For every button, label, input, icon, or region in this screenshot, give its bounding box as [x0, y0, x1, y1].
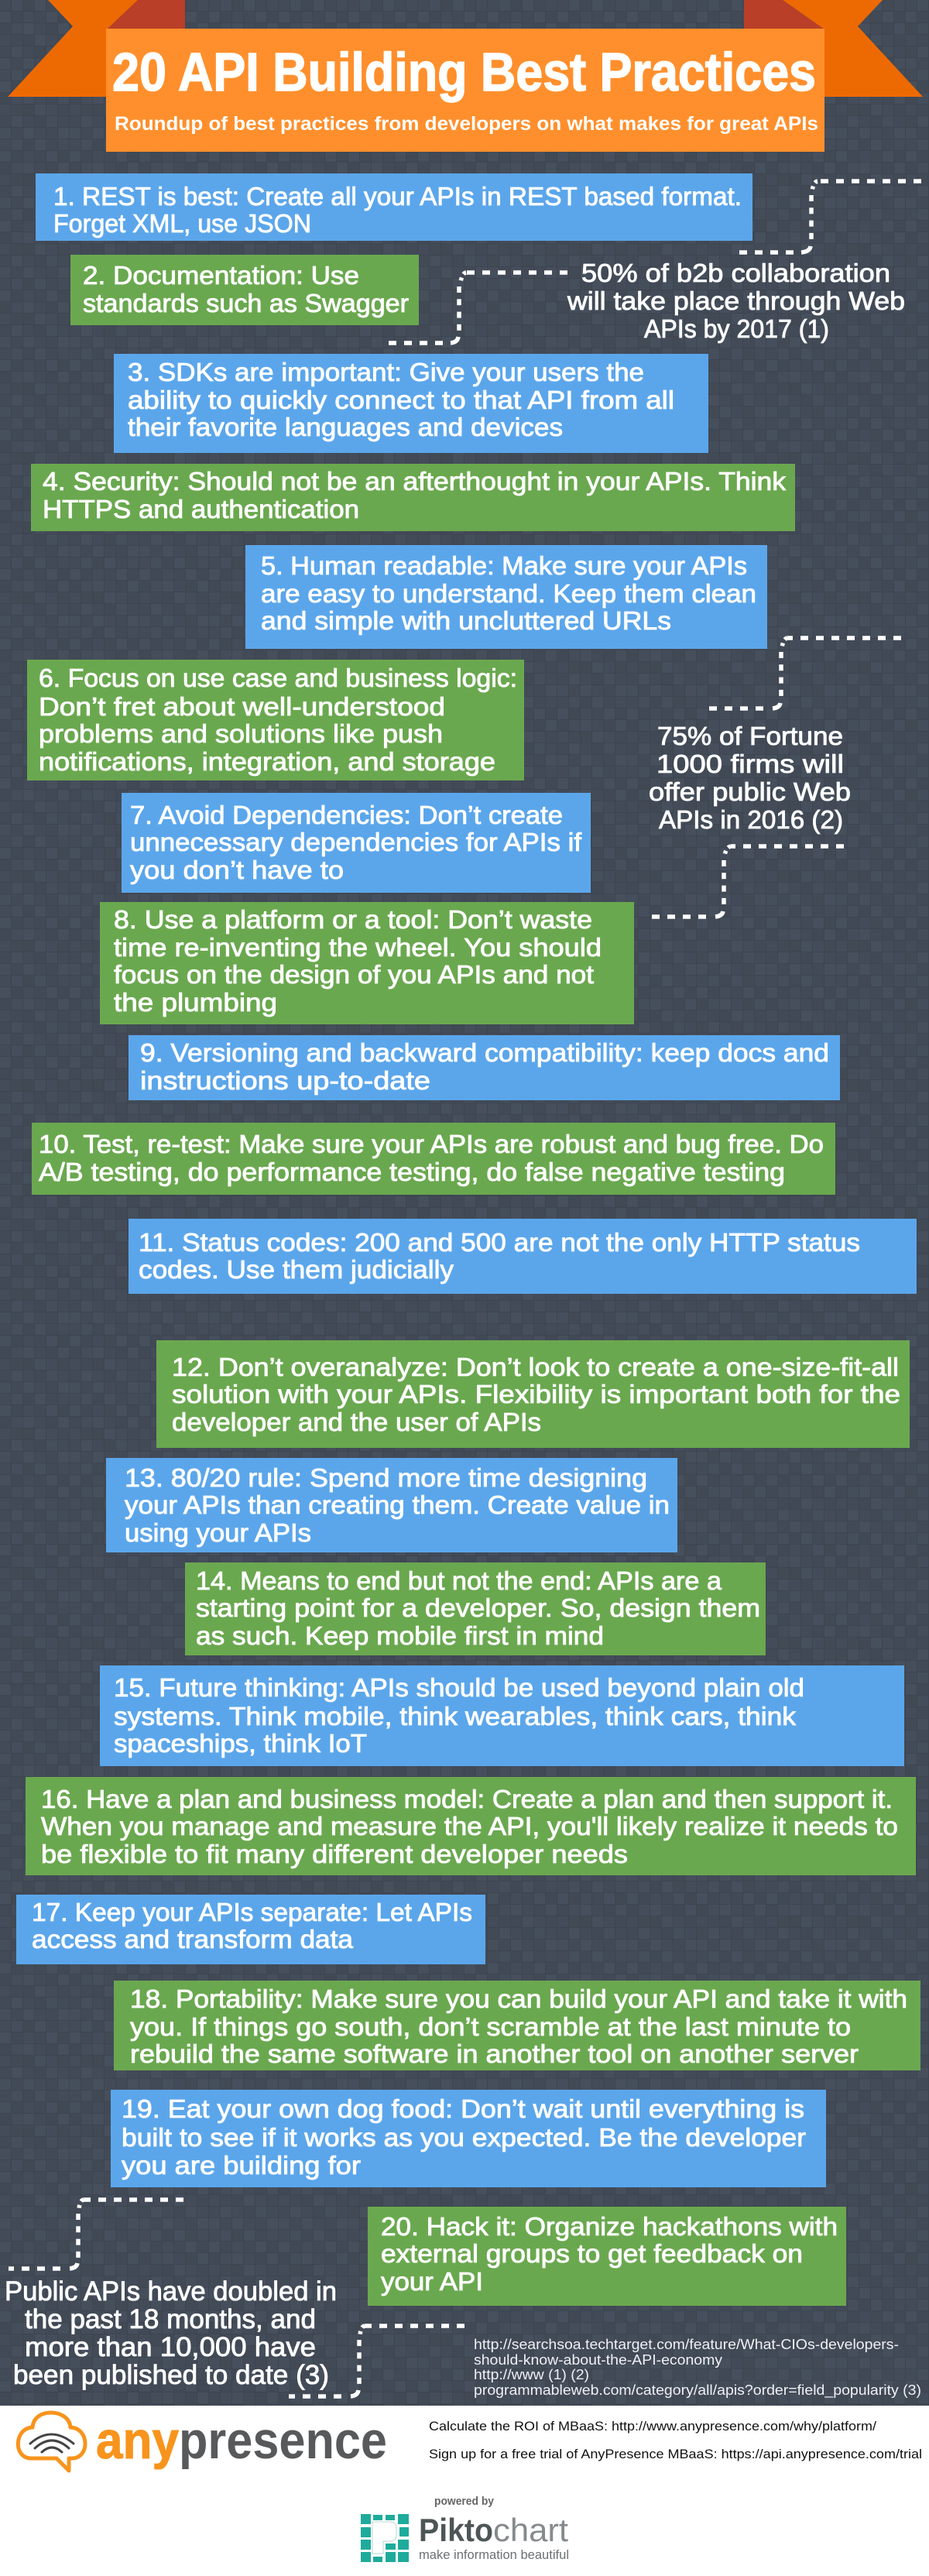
icon: Piktochart logo mark [361, 2514, 409, 2562]
card: practice 20: your API [381, 2267, 483, 2296]
footer white band [0, 2406, 929, 2576]
sources text block [474, 2337, 921, 2399]
card: practice 20: 20. Hack it: Organize hackathons with [381, 2212, 838, 2241]
logo wordmark: anypresence: presence [179, 2411, 387, 2470]
card: practice 3: their favorite languages and devices [128, 413, 563, 441]
card: practice 6: Don’t fret about well-understood [39, 692, 445, 721]
card: practice 12: solution with your APIs. Flexibility is important both for the [172, 1380, 900, 1408]
logo wordmark: anypresence: any [96, 2411, 179, 2470]
stat callout: public APIs doubled: more than 10,000 have [25, 2332, 316, 2362]
card: practice 12: 12. Don’t overanalyze: Don’t look to create a one-size-fit-all [172, 1353, 899, 1381]
card: practice 8: focus on the design of you APIs and not [114, 960, 594, 989]
ribbon fold left [107, 0, 185, 29]
dashed connector 3 [702, 638, 901, 708]
sources text block: programmableweb.com/category/all/apis?order=field_popularity (3) [474, 2382, 921, 2399]
stat callout: public APIs doubled: Public APIs have doubled in [5, 2276, 337, 2307]
card: practice 18: rebuild the same software in another tool on another server [130, 2039, 859, 2068]
card: practice 8: the plumbing [114, 988, 277, 1017]
card: practice 16 [26, 1777, 916, 1875]
card: practice 17: 17. Keep your APIs separate: Let APIs [32, 1898, 472, 1926]
stat callout: b2b collaboration: 50% of b2b collaboration [581, 259, 890, 287]
footer call-to-action links: Sign up for a free trial of AnyPresence MBaaS: https://api.anypresence.com/trial [429, 2447, 922, 2461]
card: practice 5: are easy to understand. Keep them clean [261, 579, 756, 608]
card: practice 13: using your APIs [125, 1518, 311, 1547]
card: practice 6: problems and solutions like push [39, 719, 443, 748]
card: practice 15 [100, 1665, 904, 1766]
card: practice 10 [32, 1123, 835, 1195]
stat callout: public APIs doubled: the past 18 months, and [25, 2304, 316, 2334]
card: practice 17: access and transform data [32, 1925, 354, 1953]
sources text block: should-know-about-the-API-economy [474, 2352, 722, 2368]
dashed connector 6 [289, 2326, 464, 2396]
card: practice 2: standards such as Swagger [83, 289, 409, 317]
stat callout: Fortune 1000: 1000 firms will [656, 749, 844, 778]
card: practice 10: A/B testing, do performance testing, do false negative testing [39, 1158, 785, 1186]
stat callout: Fortune 1000: offer public Web [649, 777, 851, 806]
card: practice 3: 3. SDKs are important: Give your users the [128, 358, 644, 386]
card: practice 11 [129, 1219, 917, 1294]
card: practice 16: 16. Have a plan and business model: Create a plan and then support it. [41, 1785, 893, 1813]
card: practice 13: your APIs than creating them. Create value in [125, 1490, 670, 1519]
card: practice 8: time re-inventing the wheel. You should [114, 933, 602, 962]
card: practice 18: you. If things go south, don’t scramble at the last minute to [130, 2012, 851, 2041]
dashed connector 2 [387, 273, 567, 343]
card: practice 18 [114, 1981, 920, 2070]
stat callout: public APIs doubled [5, 2276, 337, 2390]
card: practice 11: 11. Status codes: 200 and 500 are not the only HTTP status [139, 1228, 860, 1257]
card: practice 7: 7. Avoid Dependencies: Don’t create [130, 801, 563, 829]
header banner [8, 0, 923, 152]
card: practice 9: instructions up-to-date [140, 1066, 430, 1095]
logo wordmark: Piktochart [419, 2512, 569, 2562]
card: practice 12 [156, 1340, 910, 1448]
subtitle: Roundup of best practices from developers on what makes for great APIs [115, 113, 818, 135]
card: practice 3: ability to quickly connect to that API from all [128, 386, 674, 414]
stat callout: Fortune 1000: 75% of Fortune [657, 722, 843, 750]
card: practice 1 [36, 173, 752, 241]
ribbon fold right [744, 0, 824, 29]
card: practice 3 [114, 354, 708, 453]
card: practice 13: 13. 80/20 rule: Spend more time designing [125, 1463, 647, 1492]
card: practice 15: 15. Future thinking: APIs should be used beyond plain old [114, 1673, 804, 1702]
dashed connector 4 [644, 846, 844, 917]
card: practice 14: starting point for a developer. So, design them [196, 1593, 760, 1622]
sources text block: http://www (1) (2) [474, 2367, 589, 2382]
card: practice 8: 8. Use a platform or a tool: Don’t waste [114, 905, 592, 934]
card: practice 17 [16, 1895, 485, 1964]
stat callout: b2b collaboration [567, 259, 905, 343]
card: practice 11: codes. Use them judicially [139, 1255, 454, 1284]
card: practice 6: 6. Focus on use case and business logic: [39, 664, 517, 692]
dashed connector 5 [9, 2200, 183, 2269]
card: practice 5: and simple with uncluttered URLs [261, 606, 671, 635]
card: practice 2: 2. Documentation: Use [83, 261, 359, 290]
stat callout: b2b collaboration: APIs by 2017 (1) [644, 314, 829, 343]
card: practice 1: Forget XML, use JSON [53, 209, 311, 238]
logo wordmark: Piktochart: chart [493, 2512, 568, 2548]
card: practice 7: unnecessary dependencies for APIs if [130, 828, 582, 856]
card: practice 20 [368, 2207, 846, 2306]
footer call-to-action links [429, 2419, 922, 2461]
card: practice 16: When you manage and measure the API, you'll likely realize it needs to [41, 1812, 898, 1840]
card: practice 7: you don’t have to [130, 856, 344, 884]
card: practice 12: developer and the user of APIs [172, 1408, 541, 1436]
logo wordmark: anypresence [96, 2411, 387, 2470]
card: practice 9 [129, 1035, 840, 1100]
card: practice 19: you are building for [122, 2151, 361, 2180]
powered by label: powered by [434, 2495, 495, 2508]
card: practice 15: systems. Think mobile, think wearables, think cars, think [114, 1702, 797, 1730]
title panel [106, 29, 824, 152]
logo wordmark: Piktochart: make information beautiful [419, 2547, 569, 2562]
title: 20 API Building Best Practices [112, 42, 816, 102]
stat callout: b2b collaboration: will take place through Web [567, 286, 905, 315]
card: practice 2 [70, 255, 419, 325]
card: practice 10: 10. Test, re-test: Make sure your APIs are robust and bug free. Do [39, 1130, 824, 1158]
card: practice 16: be flexible to fit many different developer needs [41, 1840, 628, 1868]
card: practice 4: HTTPS and authentication [43, 495, 359, 523]
card: practice 1: 1. REST is best: Create all your APIs in REST based format. [53, 182, 742, 211]
sources text block: http://searchsoa.techtarget.com/feature/What-CIOs-developers- [474, 2337, 899, 2352]
card: practice 18: 18. Portability: Make sure you can build your API and take it with [130, 1984, 907, 2013]
card: practice 4 [31, 464, 795, 531]
card: practice 4: 4. Security: Should not be an afterthought in your APIs. Think [43, 467, 787, 496]
card: practice 14: 14. Means to end but not the end: APIs are a [196, 1566, 722, 1595]
logo wordmark: Piktochart: Pikto [419, 2512, 493, 2548]
card: practice 19: built to see if it works as you expected. Be the developer [122, 2123, 806, 2152]
card: practice 15: spaceships, think IoT [114, 1729, 367, 1758]
card: practice 14: as such. Keep mobile first in mind [196, 1621, 604, 1650]
card: practice 19 [111, 2090, 826, 2187]
stat callout: public APIs doubled: been published to date (3) [13, 2360, 329, 2390]
ribbon right [783, 0, 923, 97]
card: practice 9: 9. Versioning and backward compatibility: keep docs and [140, 1038, 829, 1067]
card: practice 14 [185, 1562, 766, 1655]
card: practice 6 [27, 660, 524, 780]
icon: anypresence cloud [18, 2413, 85, 2471]
card: practice 19: 19. Eat your own dog food: Don’t wait until everything is [122, 2094, 804, 2123]
card: practice 5: 5. Human readable: Make sure your APIs [261, 551, 747, 580]
card: practice 20: external groups to get feedback on [381, 2239, 803, 2268]
ribbon left [8, 0, 138, 97]
dashed connector 1 [739, 181, 921, 252]
card: practice 7 [122, 793, 591, 893]
stat callout: Fortune 1000 [649, 722, 851, 834]
card: practice 8 [100, 902, 634, 1024]
card: practice 13 [106, 1458, 677, 1552]
stat callout: Fortune 1000: APIs in 2016 (2) [659, 805, 843, 834]
card: practice 5 [245, 545, 767, 649]
card: practice 6: notifications, integration, and storage [39, 747, 495, 776]
footer call-to-action links: Calculate the ROI of MBaaS: http://www.anypresence.com/why/platform/ [429, 2419, 876, 2434]
